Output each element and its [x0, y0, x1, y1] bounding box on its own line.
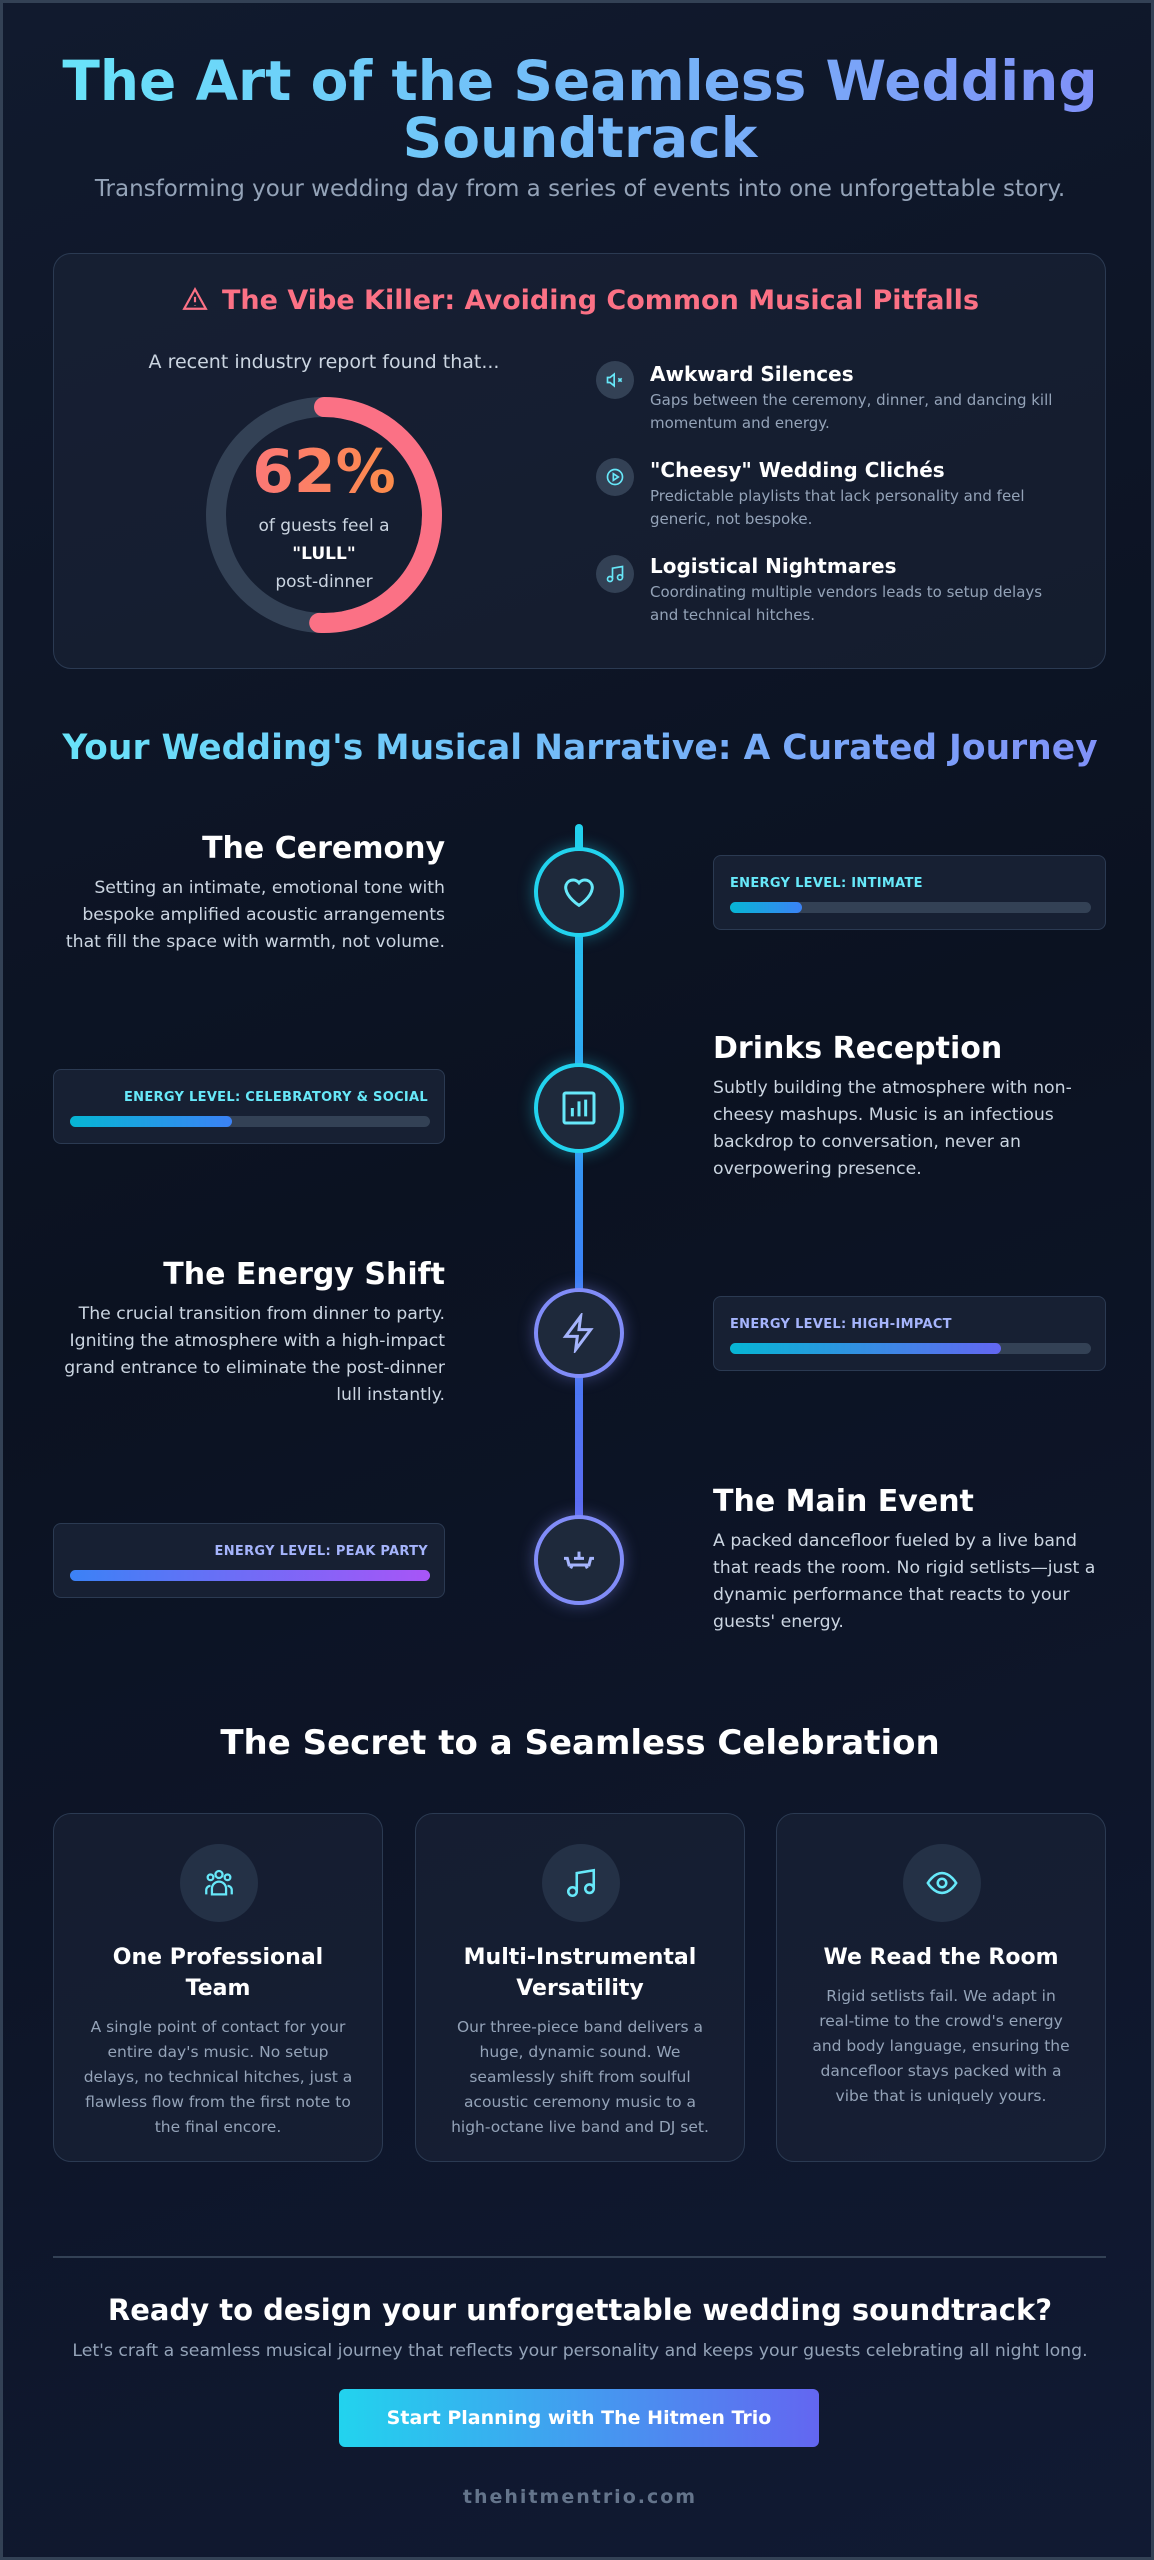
CTA subtext: Let's craft a seamless musical journey that reflects your personality and keeps your guests celebrating all night long. — [72, 2341, 1088, 2361]
card: read the room: real-time to the crowd's energy — [819, 2012, 1063, 2030]
card: read the room — [776, 1813, 1106, 2162]
section heading: journey: Your Wedding's Musical Narrative: A Curated Journey — [62, 728, 1098, 768]
card: multi-instrumental: Multi-Instrumental — [464, 1945, 696, 1970]
stage: main event: The Main Event — [713, 1484, 974, 1519]
card: read the room: Rigid setlists fail. We adapt in — [826, 1987, 1056, 2005]
stage: ceremony: The Ceremony — [202, 831, 445, 866]
card: read the room: dancefloor stays packed with a — [820, 2062, 1061, 2080]
energy bar: peak party — [53, 1523, 445, 1598]
donut chart: 62%: post-dinner — [275, 572, 373, 592]
node: lightning — [534, 1288, 624, 1378]
energy bar: peak party: ENERGY LEVEL: PEAK PARTY — [215, 1544, 428, 1559]
card: multi-instrumental: high-octane live band and DJ set. — [451, 2118, 709, 2136]
energy bar: celebratory: ENERGY LEVEL: CELEBRATORY & SOCIAL — [124, 1090, 428, 1105]
CTA button — [339, 2389, 819, 2447]
section heading: secret: The Secret to a Seamless Celebration — [220, 1723, 940, 1763]
card: one professional team — [53, 1813, 383, 2162]
icon: team — [180, 1844, 258, 1922]
stat intro text: A recent industry report found that... — [149, 351, 499, 373]
stage: drinks reception — [713, 1031, 1072, 1179]
donut chart: 62%: 62% — [252, 437, 396, 507]
stage: drinks reception: Drinks Reception — [713, 1031, 1002, 1066]
donut chart: 62% — [206, 397, 442, 633]
CTA heading: Ready to design your unforgettable wedding soundtrack? — [108, 2293, 1052, 2327]
stage: drinks reception: Subtly building the atmosphere with non-cheesy mashups. Music is an infectious backdrop to conversation, never an overpowering presence. — [713, 1078, 1072, 1179]
donut chart: 62%: of guests feel a — [258, 516, 390, 536]
card: multi-instrumental: huge, dynamic sound. We — [480, 2043, 680, 2061]
icon: eye — [903, 1844, 981, 1922]
pitfall list — [596, 361, 1052, 624]
energy bar: celebratory — [53, 1069, 445, 1144]
pitfall list: Gaps between the ceremony, dinner, and dancing kill momentum and energy. — [650, 391, 1052, 432]
energy bar: intimate — [713, 855, 1106, 930]
card: one professional team: delays, no technical hitches, just a — [84, 2068, 352, 2086]
title: The Art of the Seamless Wedding — [62, 49, 1098, 113]
stage: energy shift: The Energy Shift — [163, 1257, 445, 1292]
CTA button: Start Planning with The Hitmen Trio — [387, 2407, 771, 2429]
timeline line — [575, 824, 583, 1566]
stage: energy shift — [64, 1257, 445, 1405]
title: Soundtrack — [403, 106, 757, 170]
card: one professional team: A single point of contact for your — [91, 2018, 345, 2036]
icon: play — [596, 458, 634, 496]
stage: ceremony — [66, 831, 445, 952]
panel: vibe killer — [53, 253, 1106, 669]
item: logistical nightmares: Logistical Nightmares — [650, 554, 897, 578]
card: multi-instrumental: seamlessly shift from soulful — [469, 2068, 691, 2086]
card: one professional team: One Professional — [113, 1945, 323, 1970]
footer: thehitmentrio.com — [463, 2486, 697, 2508]
card: multi-instrumental — [415, 1813, 745, 2162]
stage: energy shift: The crucial transition from dinner to party. Igniting the atmosphere with a high-impact grand entrance to eliminate the post-dinner lull instantly. — [64, 1304, 445, 1405]
energy bar: high-impact — [713, 1296, 1106, 1371]
icon: muted speaker — [596, 361, 634, 399]
card: one professional team: the final encore. — [155, 2118, 281, 2136]
card: one professional team: flawless flow from the first note to — [85, 2093, 351, 2111]
pitfall list: Coordinating multiple vendors leads to setup delays and technical hitches. — [650, 583, 1042, 624]
timeline — [53, 824, 1106, 1632]
energy bar: intimate: ENERGY LEVEL: INTIMATE — [730, 876, 923, 891]
energy bar: high-impact: ENERGY LEVEL: HIGH-IMPACT — [730, 1317, 952, 1332]
item: cheesy cliches: "Cheesy" Wedding Clichés — [650, 458, 945, 482]
title — [3, 53, 1154, 167]
icon: music note — [596, 555, 634, 593]
card: read the room: and body language, ensuring the — [812, 2037, 1070, 2055]
panel heading: The Vibe Killer: Avoiding Common Musical Pitfalls — [222, 285, 979, 316]
pitfall list: Predictable playlists that lack personality and feel generic, not bespoke. — [650, 487, 1025, 528]
card: read the room: We Read the Room — [823, 1945, 1059, 1970]
card: read the room: vibe that is uniquely yours. — [836, 2087, 1046, 2105]
stage: main event: A packed dancefloor fueled by a live band that reads the room. No rigid setlists—just a dynamic performance that reacts to your guests' energy. — [713, 1531, 1095, 1632]
card: multi-instrumental: acoustic ceremony music to a — [464, 2093, 696, 2111]
item: awkward silences: Awkward Silences — [650, 362, 854, 386]
node: party — [534, 1515, 624, 1605]
subtitle: Transforming your wedding day from a series of events into one unforgettable story. — [95, 176, 1065, 202]
node: bars — [534, 1063, 624, 1153]
donut chart: 62%: "LULL" — [292, 544, 356, 564]
card: one professional team: Team — [186, 1976, 250, 2001]
card: multi-instrumental: Our three-piece band delivers a — [457, 2018, 703, 2036]
card: one professional team: entire day's music. No setup — [107, 2043, 329, 2061]
card: multi-instrumental: Versatility — [516, 1976, 644, 2001]
stage: ceremony: Setting an intimate, emotional tone with bespoke amplified acoustic arrangements that fill the space with warmth, not volume. — [66, 878, 445, 952]
node: heart — [534, 847, 624, 937]
icon: music — [542, 1844, 620, 1922]
stage: main event — [713, 1484, 1095, 1632]
